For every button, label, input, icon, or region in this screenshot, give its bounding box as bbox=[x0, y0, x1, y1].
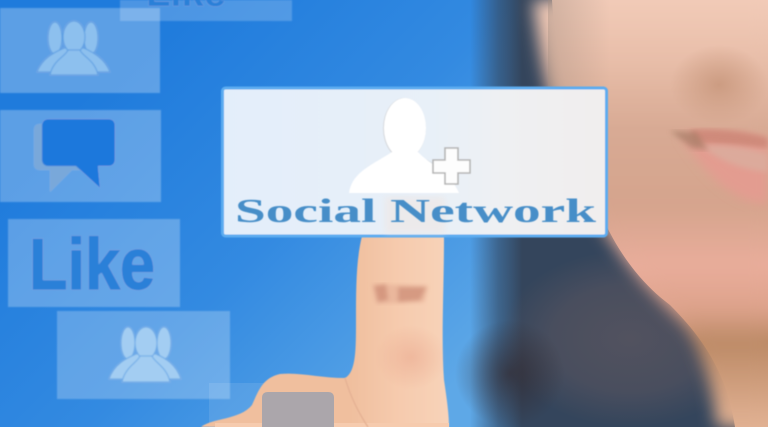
card label: Social Network bbox=[235, 193, 596, 230]
icon: person with plus bbox=[349, 98, 470, 193]
social icon tile: top like bbox=[120, 0, 292, 21]
social icon tile: people bottom bbox=[57, 311, 230, 399]
knuckle crease bbox=[372, 284, 428, 304]
finger and thumb shape bbox=[201, 236, 449, 427]
hair bbox=[455, 0, 768, 427]
mouth bbox=[670, 129, 768, 204]
woman's blurred portrait bbox=[455, 0, 768, 427]
thumb nail bbox=[262, 392, 334, 427]
social icon tile: speech bubble bbox=[0, 110, 161, 202]
card panel bbox=[222, 88, 606, 236]
hand and pointing finger bbox=[201, 236, 449, 427]
social icon tile: people top bbox=[0, 8, 160, 93]
finger ghost bbox=[385, 197, 445, 233]
palm crease bbox=[345, 378, 368, 427]
finger shading bbox=[375, 325, 447, 390]
face and neck bbox=[533, 0, 768, 427]
social icon tile: like: Like bbox=[29, 225, 155, 305]
social icon tile: partially hidden bottom bbox=[209, 383, 399, 427]
social network card bbox=[222, 88, 606, 236]
